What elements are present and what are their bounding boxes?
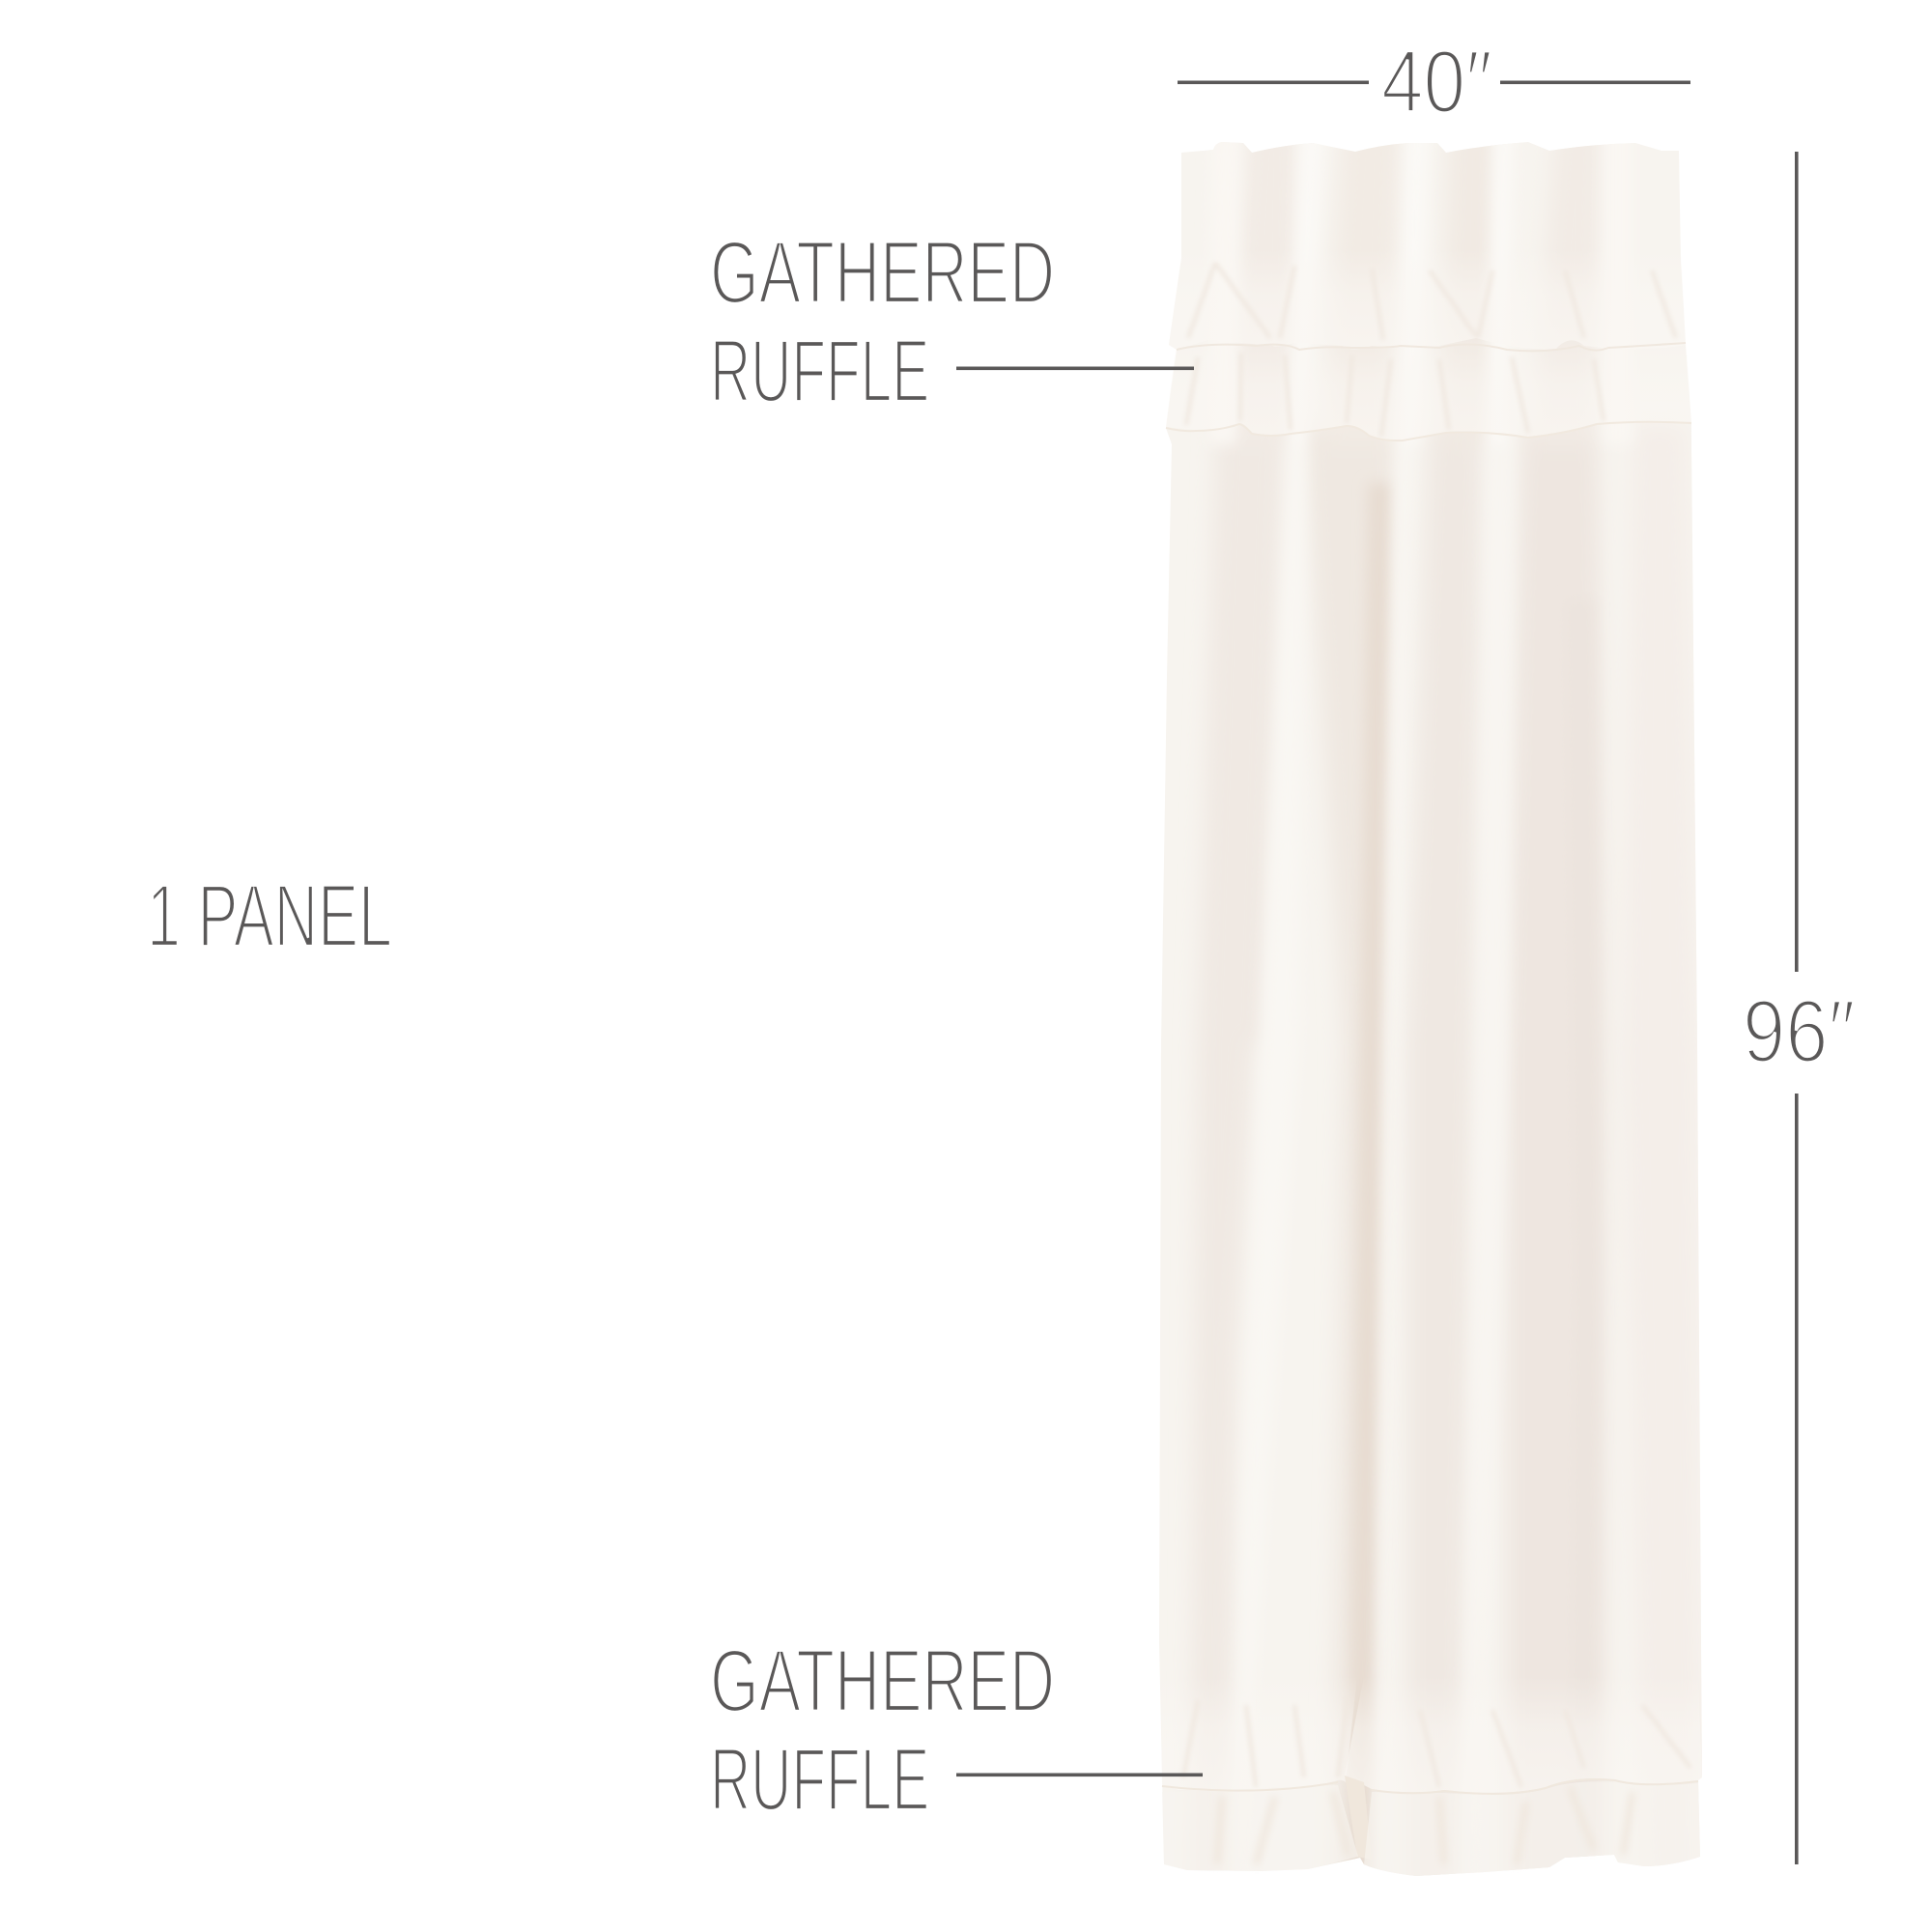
top ruffle: lower tier: [1166, 338, 1691, 440]
bottom ruffle: upper tier: [1161, 1676, 1702, 1860]
curtain body: [1150, 126, 1719, 1893]
callout: top gathered ruffle: RUFFLE: [710, 322, 929, 421]
bottom ruffle: lower tier: [1162, 1779, 1700, 1876]
crease shadow: [1347, 483, 1391, 1864]
label: 1 panel: 1 PANEL: [147, 866, 392, 966]
dimension: width 40 inches: [1178, 32, 1690, 131]
callout: bottom gathered ruffle: [710, 1631, 1203, 1830]
top ruffle: upper tier: [1169, 249, 1686, 351]
light pleats: [1217, 143, 1511, 448]
fabric folds: [1197, 145, 1601, 1862]
dimension: height 96 inches: [1743, 152, 1856, 1864]
callout: top gathered ruffle: [710, 222, 1194, 421]
curtain panel: [1150, 126, 1719, 1893]
dimension: height 96 inches: 96″: [1743, 980, 1856, 1081]
callout: bottom gathered ruffle: RUFFLE: [710, 1730, 929, 1830]
callout: bottom gathered ruffle: GATHERED: [710, 1631, 1055, 1730]
callout: top gathered ruffle: GATHERED: [710, 222, 1055, 322]
dimension: width 40 inches: 40″: [1381, 32, 1492, 131]
